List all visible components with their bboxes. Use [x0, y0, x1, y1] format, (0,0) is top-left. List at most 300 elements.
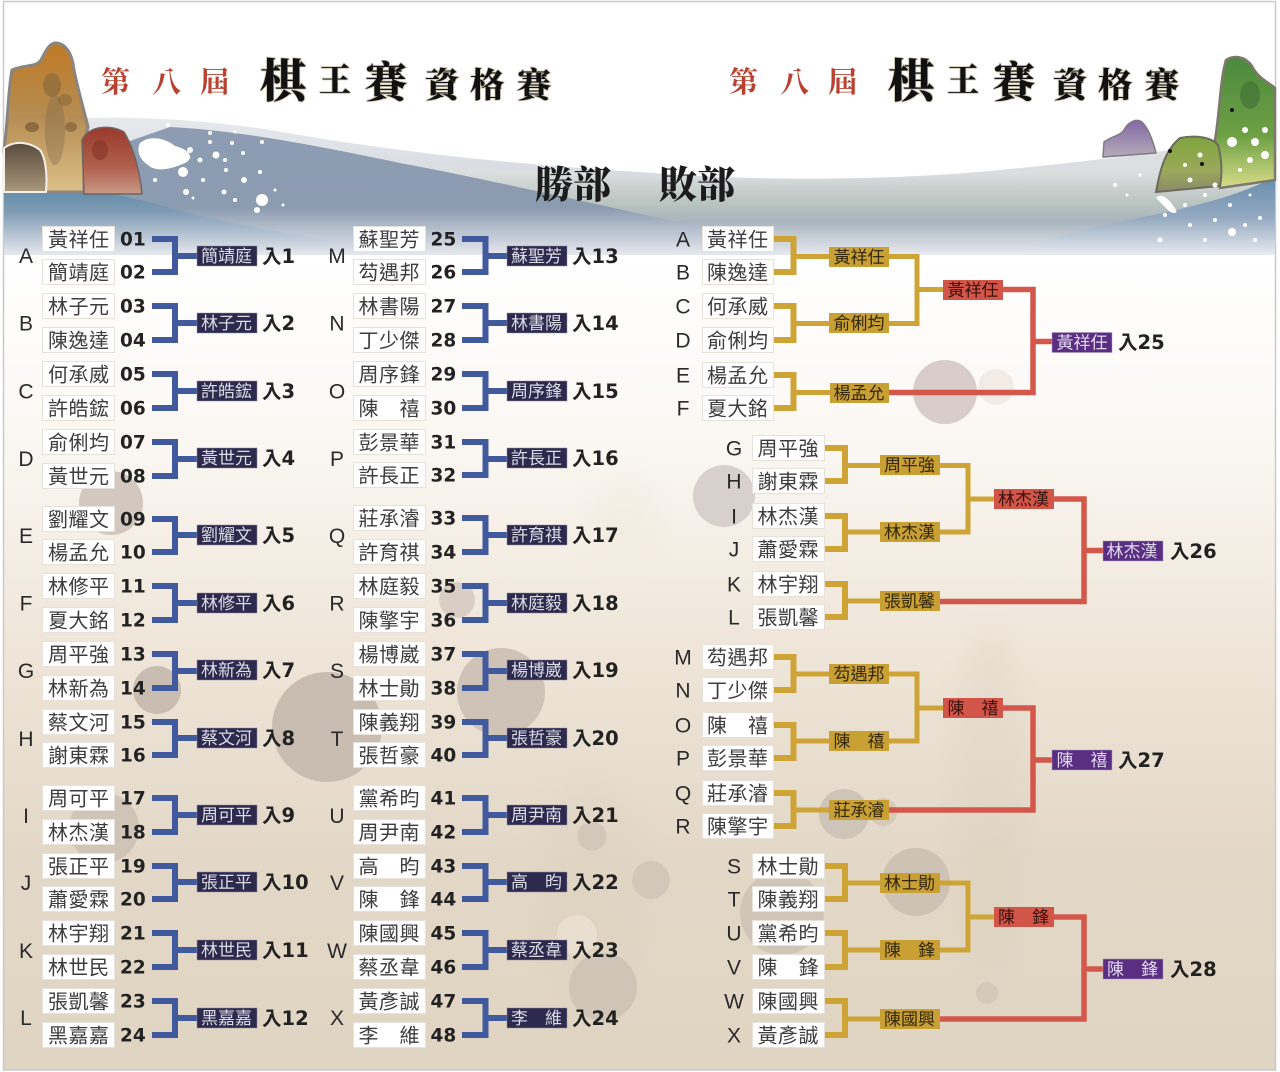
match D: 入4 — [262, 447, 295, 470]
match B — [19, 290, 295, 354]
panel: winners bracket column 2 — [327, 224, 619, 1048]
match T — [331, 706, 619, 768]
title: right: 八 — [780, 60, 809, 101]
round winners: 陳 禧 — [1056, 746, 1108, 771]
player names: 謝東霖 — [758, 466, 819, 494]
round winners: 張凱馨 — [884, 587, 935, 612]
match V: 入22 — [572, 871, 619, 894]
player names: S — [727, 856, 741, 878]
player names: 林士勛 — [758, 850, 819, 880]
entry label: 入27 — [1118, 749, 1165, 772]
player names: 夏大銘 — [707, 392, 768, 422]
match W: 45 — [430, 924, 456, 944]
match L: L — [20, 1007, 32, 1030]
match O — [329, 358, 619, 422]
match D: 黃世元 — [48, 460, 110, 490]
match Q — [329, 502, 619, 566]
match D — [18, 426, 295, 490]
match N: 林書陽 — [511, 309, 562, 334]
match A: A — [19, 245, 33, 268]
title: left: 棋 — [260, 45, 310, 111]
left rocks illustration — [4, 43, 142, 194]
match H: 15 — [120, 712, 146, 734]
match J: 19 — [120, 856, 146, 878]
title: right: 棋 — [888, 45, 938, 111]
match B: 03 — [120, 296, 146, 318]
match I: 入9 — [262, 804, 295, 827]
player names: 陳擎宇 — [707, 810, 768, 840]
bracket lines — [825, 448, 1103, 617]
match B: 林子元 — [201, 309, 252, 334]
title: left: 資 — [425, 58, 462, 107]
entry label: 入28 — [1170, 958, 1217, 981]
ink wave band — [4, 118, 1275, 255]
match N: 丁少傑 — [358, 324, 420, 354]
match P: 入16 — [572, 447, 619, 470]
match X: 黃彥誠 — [358, 986, 420, 1014]
match M: M — [328, 245, 346, 268]
player names: K — [727, 574, 741, 596]
player names: N — [675, 680, 691, 702]
match W: W — [327, 940, 347, 963]
match F: 林修平 — [48, 570, 110, 600]
match C: 何承威 — [48, 358, 110, 388]
match W: 入23 — [572, 939, 619, 962]
player names: 陳逸達 — [707, 256, 768, 286]
match U: 周尹南 — [358, 816, 420, 846]
player names: R — [675, 816, 691, 838]
match R: 35 — [430, 576, 456, 598]
match K: 入11 — [262, 939, 309, 962]
left ink splash — [138, 123, 284, 213]
heading: losers: 敗部 — [659, 154, 735, 209]
match L: 黑嘉嘉 — [201, 1004, 252, 1029]
title: right — [729, 45, 1182, 111]
match W: 陳國興 — [358, 918, 420, 946]
title: right: 賽 — [1145, 58, 1182, 107]
title: left: 王 — [319, 55, 351, 101]
match R: 陳擎宇 — [358, 604, 420, 634]
match S — [330, 638, 619, 702]
player names: W — [724, 990, 744, 1014]
match P — [330, 426, 619, 488]
match G: 13 — [120, 644, 146, 666]
match I: 林杰漢 — [48, 816, 110, 846]
entry label: 入26 — [1170, 540, 1217, 563]
round winners: 陳 鋒 — [998, 903, 1049, 928]
title: right: 屆 — [828, 60, 857, 101]
panel: losers bracket group 1 — [675, 224, 1165, 422]
match A: 入1 — [262, 245, 295, 268]
match N: 28 — [430, 330, 456, 352]
player names: 黃祥任 — [707, 224, 768, 252]
title: left: 格 — [470, 58, 504, 107]
match M: 入13 — [572, 245, 619, 268]
match B: 林子元 — [48, 290, 110, 320]
match C: C — [18, 380, 34, 404]
panel: losers bracket group 4 — [724, 850, 1217, 1048]
match Q: 33 — [430, 508, 456, 530]
match D: 黃世元 — [201, 444, 252, 469]
player names: X — [727, 1024, 741, 1048]
round winners — [829, 660, 1112, 821]
match D: 08 — [120, 466, 146, 488]
match A: 01 — [120, 230, 146, 250]
match V: V — [330, 872, 344, 895]
match Q: 許育祺 — [511, 521, 562, 546]
player names: 陳國興 — [758, 986, 819, 1014]
match E: E — [19, 525, 33, 548]
match V: 43 — [430, 856, 456, 878]
round winners: 陳 鋒 — [1107, 955, 1158, 980]
match H: 入8 — [262, 727, 295, 750]
match P: P — [330, 448, 344, 471]
match M: 蘇聖芳 — [358, 224, 420, 252]
round winners: 黃祥任 — [948, 276, 998, 301]
match U: 黨希昀 — [358, 782, 420, 812]
match T: 40 — [430, 746, 456, 766]
player names: 楊孟允 — [707, 360, 768, 388]
match W — [327, 918, 619, 980]
match C — [18, 358, 295, 422]
player names: B — [676, 262, 690, 284]
match W: 蔡丞韋 — [358, 952, 420, 980]
match H: 蔡文河 — [48, 706, 110, 736]
match W: 蔡丞韋 — [511, 936, 562, 961]
match I — [23, 782, 295, 846]
round winners: 俞俐均 — [834, 309, 884, 334]
match F — [20, 570, 295, 634]
title: left: 賽 — [365, 50, 410, 110]
match G: 林新為 — [48, 672, 110, 702]
player names: T — [728, 888, 741, 912]
match K: 林宇翔 — [48, 918, 110, 946]
player names: F — [677, 398, 689, 420]
round winners: 芶遇邦 — [834, 660, 884, 685]
match P: 許長正 — [511, 444, 562, 469]
match N: 27 — [430, 296, 456, 318]
match L — [20, 986, 309, 1048]
match E — [19, 504, 295, 566]
match M: 芶遇邦 — [358, 256, 420, 286]
match S: 37 — [430, 644, 456, 666]
match F: 11 — [120, 576, 146, 598]
match C: 06 — [120, 398, 146, 420]
player names: A — [676, 228, 690, 252]
match O: O — [329, 380, 345, 404]
match Q: 34 — [430, 542, 456, 564]
match J — [21, 850, 309, 912]
match I: I — [23, 805, 29, 828]
match U — [329, 782, 619, 846]
match U: 入21 — [572, 804, 619, 827]
player names: 黃彥誠 — [758, 1020, 819, 1048]
match S: S — [330, 660, 344, 683]
match C: 05 — [120, 364, 146, 386]
player names — [726, 432, 824, 630]
player names: 陳義翔 — [758, 884, 819, 912]
match U: 42 — [430, 822, 456, 844]
player names: P — [676, 748, 690, 770]
match R: R — [329, 592, 345, 616]
match T: 陳義翔 — [358, 706, 420, 736]
match V: 高 昀 — [511, 868, 562, 893]
match S: 38 — [430, 678, 456, 700]
round winners: 陳 禧 — [834, 727, 884, 752]
match E: 劉耀文 — [201, 521, 252, 546]
match V: 44 — [430, 890, 456, 910]
player names: 丁少傑 — [707, 674, 768, 704]
player names — [724, 850, 824, 1048]
match G — [18, 638, 295, 702]
round winners — [829, 243, 1112, 404]
match Q: 莊承濬 — [358, 502, 420, 532]
player names: 俞俐均 — [707, 324, 768, 354]
round winners: 黃祥任 — [1056, 328, 1108, 354]
round winners: 林士勛 — [884, 869, 935, 894]
match D: D — [18, 448, 34, 471]
title: left: 八 — [152, 60, 181, 101]
match G: 林新為 — [201, 656, 252, 681]
match K: 21 — [120, 924, 146, 944]
bracket lines — [825, 866, 1103, 1035]
match S: 楊博崴 — [511, 656, 562, 681]
match K: 林世民 — [201, 936, 252, 961]
title: right: 格 — [1098, 58, 1132, 107]
player names: 彭景華 — [707, 742, 768, 772]
title: right: 賽 — [993, 50, 1038, 110]
match L: 24 — [120, 1026, 146, 1046]
match X: 李 維 — [358, 1020, 420, 1048]
match H: H — [18, 728, 34, 751]
heading: winners: 勝部 — [535, 154, 611, 209]
player names — [674, 642, 774, 840]
match N: N — [329, 312, 345, 336]
match F: 12 — [120, 610, 146, 632]
title: right: 資 — [1053, 58, 1090, 107]
player names: 陳 鋒 — [758, 952, 819, 980]
match P: 彭景華 — [358, 426, 420, 456]
round winners — [880, 451, 1163, 612]
match S: 林士勛 — [358, 672, 420, 702]
match K — [19, 918, 309, 980]
match N: 林書陽 — [358, 290, 420, 320]
title: right: 第 — [729, 60, 758, 101]
match A: 簡靖庭 — [201, 242, 252, 267]
player names: H — [726, 470, 742, 494]
match K: K — [19, 940, 33, 963]
match R: 林庭毅 — [358, 570, 420, 600]
match N: 入14 — [572, 312, 619, 335]
match P: 32 — [430, 466, 456, 486]
match A — [19, 224, 295, 286]
match A: 黃祥任 — [48, 224, 110, 252]
round winners: 林杰漢 — [998, 485, 1049, 510]
title: left — [101, 45, 554, 111]
match T: 張哲豪 — [511, 724, 562, 749]
match H: 16 — [120, 746, 146, 766]
match T: 張哲豪 — [358, 740, 420, 768]
round winners: 黃祥任 — [834, 243, 884, 268]
match I: 周可平 — [48, 782, 110, 812]
match O: 周序鋒 — [511, 377, 562, 402]
match P: 許長正 — [358, 460, 420, 488]
match B: 入2 — [262, 312, 295, 335]
player names: I — [731, 506, 737, 528]
match G: 14 — [120, 678, 146, 700]
match O: 入15 — [572, 380, 619, 403]
match E: 入5 — [262, 524, 295, 547]
match L: 黑嘉嘉 — [48, 1020, 110, 1048]
entry label: 入25 — [1118, 331, 1165, 354]
match B: 04 — [120, 330, 146, 352]
match C: 許皓鋐 — [201, 377, 252, 402]
match M: 蘇聖芳 — [511, 242, 562, 267]
match D: 07 — [120, 432, 146, 454]
player names: 林宇翔 — [758, 568, 819, 598]
match L: 23 — [120, 992, 146, 1012]
title: left: 賽 — [517, 58, 554, 107]
match J: 20 — [120, 890, 146, 910]
match W: 46 — [430, 958, 456, 978]
match G: G — [18, 660, 34, 683]
match P: 31 — [430, 432, 456, 454]
player names: 林杰漢 — [758, 500, 819, 530]
match A: 02 — [120, 262, 146, 284]
player names: C — [675, 296, 691, 318]
match L: 張凱馨 — [48, 986, 110, 1014]
match Q: 入17 — [572, 524, 619, 547]
match F: 夏大銘 — [48, 604, 110, 634]
player names: D — [675, 330, 691, 352]
match C: 入3 — [262, 380, 295, 403]
match F: 入6 — [262, 592, 295, 615]
match Q: 許育祺 — [358, 536, 420, 566]
round winners: 周平強 — [884, 451, 935, 476]
player names — [675, 224, 774, 422]
match R: 入18 — [572, 592, 619, 615]
player names: 芶遇邦 — [707, 642, 768, 670]
match T: 39 — [430, 712, 456, 734]
match D: 俞俐均 — [48, 426, 110, 456]
bracket lines — [774, 239, 1052, 408]
match U: 41 — [430, 788, 456, 810]
match E: 劉耀文 — [48, 504, 110, 532]
right rocks illustration — [1103, 57, 1275, 192]
match J: 張正平 — [48, 850, 110, 880]
match F: F — [20, 592, 32, 616]
match L: 入12 — [262, 1007, 309, 1030]
player names: 張凱馨 — [758, 602, 819, 630]
match N — [329, 290, 619, 354]
match X: X — [330, 1007, 344, 1030]
match M: 26 — [430, 262, 456, 284]
match V: 高 昀 — [358, 850, 420, 880]
decorative circles — [69, 360, 1014, 1021]
match J: 蕭愛霖 — [48, 884, 110, 912]
round winners: 林杰漢 — [884, 518, 935, 543]
bracket lines — [774, 657, 1052, 826]
player names: L — [728, 606, 740, 630]
match H: 謝東霖 — [48, 740, 110, 768]
round winners: 楊孟允 — [834, 379, 884, 404]
player names: E — [676, 364, 690, 388]
title: left: 屆 — [200, 60, 229, 101]
player names: J — [729, 538, 739, 562]
round winners: 陳 鋒 — [884, 936, 935, 961]
match K: 林世民 — [48, 952, 110, 980]
match B: 陳逸達 — [48, 324, 110, 354]
round winners — [880, 869, 1163, 1030]
title: right: 王 — [947, 55, 979, 101]
player names: 周平強 — [758, 432, 819, 462]
match X — [330, 986, 619, 1048]
match I: 周可平 — [201, 801, 252, 826]
player names: M — [674, 646, 692, 670]
match O: 29 — [430, 364, 456, 386]
round winners: 莊承濬 — [834, 796, 884, 821]
player names: O — [675, 714, 691, 738]
match J: 入10 — [262, 871, 309, 894]
player names: Q — [675, 782, 691, 806]
match O: 陳 禧 — [358, 392, 420, 422]
match R: 林庭毅 — [511, 589, 562, 614]
match Q: Q — [329, 525, 345, 548]
match X: 入24 — [572, 1007, 619, 1030]
player names: 陳 禧 — [707, 710, 768, 738]
match C: 許皓鋐 — [48, 392, 110, 422]
player names: V — [727, 956, 741, 980]
right ink splash — [1113, 127, 1269, 242]
match F: 林修平 — [201, 589, 252, 614]
match X: 47 — [430, 992, 456, 1012]
panel: losers bracket group 2 — [726, 432, 1217, 630]
match R — [329, 570, 619, 634]
match M — [328, 224, 619, 286]
match K: 22 — [120, 958, 146, 978]
match X: 李 維 — [511, 1004, 562, 1029]
player names: 蕭愛霖 — [758, 534, 819, 562]
player names: U — [726, 922, 742, 946]
match J: J — [21, 872, 31, 895]
player names: 莊承濬 — [707, 778, 768, 806]
match U: 周尹南 — [511, 801, 562, 826]
match X: 48 — [430, 1026, 456, 1046]
match E: 10 — [120, 542, 146, 564]
match O: 30 — [430, 398, 456, 420]
match A: 簡靖庭 — [48, 256, 110, 286]
match V — [330, 850, 619, 912]
match E: 楊孟允 — [48, 536, 110, 566]
player names: 黨希昀 — [758, 918, 819, 946]
match I: 18 — [120, 822, 146, 844]
round winners: 陳國興 — [884, 1005, 935, 1030]
player names: 何承威 — [707, 290, 768, 320]
round winners: 林杰漢 — [1106, 537, 1158, 562]
match G: 周平強 — [48, 638, 110, 668]
match T: 入20 — [572, 727, 619, 750]
panel: winners bracket column 1 — [18, 224, 309, 1048]
panel: losers bracket group 3 — [674, 642, 1165, 840]
match H — [18, 706, 295, 768]
match V: 陳 鋒 — [358, 884, 420, 912]
match U: U — [329, 805, 345, 828]
round winners: 陳 禧 — [948, 694, 998, 719]
match O: 周序鋒 — [358, 358, 420, 388]
match M: 25 — [430, 230, 456, 250]
match J: 張正平 — [201, 868, 252, 893]
match R: 36 — [430, 610, 456, 632]
